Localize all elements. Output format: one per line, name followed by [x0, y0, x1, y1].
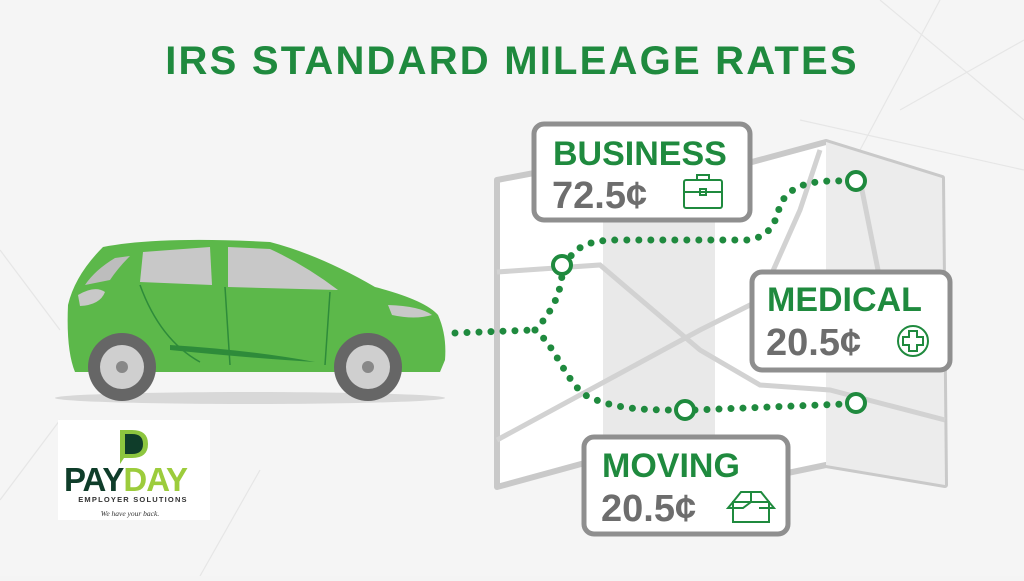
dotted routes	[455, 181, 845, 410]
card: business: 72.5¢	[552, 175, 647, 217]
logo	[58, 420, 210, 520]
icon: box	[728, 492, 774, 522]
card: medical: 20.5¢	[766, 322, 861, 364]
card: moving: MOVING	[602, 447, 740, 485]
map	[497, 142, 945, 488]
route nodes	[553, 172, 865, 419]
car	[55, 240, 445, 404]
card: medical: MEDICAL	[767, 281, 922, 319]
card: business: BUSINESS	[553, 135, 727, 173]
title: IRS STANDARD MILEAGE RATES	[165, 39, 859, 83]
card: moving: 20.5¢	[601, 488, 696, 530]
card: moving	[584, 437, 788, 534]
card: business	[534, 124, 750, 220]
logo: EMPLOYER SOLUTIONS	[78, 495, 188, 504]
logo: PAYDAY	[64, 461, 188, 498]
icon: medical cross	[898, 326, 928, 356]
card: medical	[752, 272, 950, 370]
logo: We have your back.	[101, 509, 159, 518]
icon: briefcase	[684, 175, 722, 208]
